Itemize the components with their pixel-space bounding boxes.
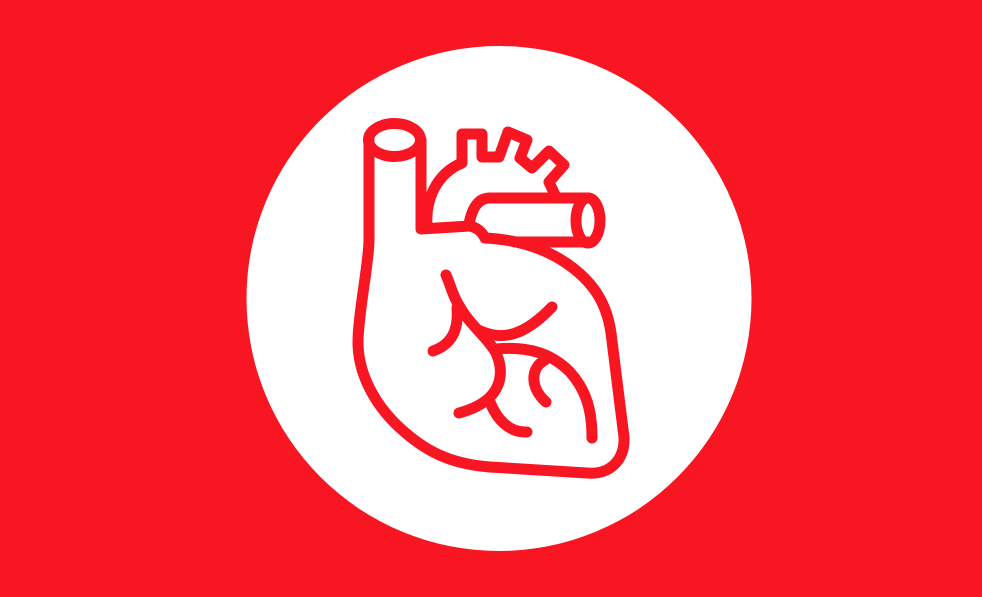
heart outer wall: [358, 140, 624, 473]
coronary vessel: upper right branch: [478, 307, 552, 336]
aortic arch with branches: [427, 132, 564, 226]
pulmonary artery opening: [576, 198, 600, 243]
coronary vessel: main: [446, 275, 500, 413]
icon: anatomical heart: [358, 124, 624, 473]
white circle: [246, 46, 752, 551]
superior vena cava opening: [368, 124, 420, 156]
coronary vessel: lower branch: [490, 402, 527, 432]
coronary vessel: long right branch: [496, 348, 592, 438]
coronary vessel: left branch: [433, 308, 457, 351]
coronary vessel: inner hook branch: [534, 360, 546, 402]
pulmonary artery: [469, 198, 588, 242]
